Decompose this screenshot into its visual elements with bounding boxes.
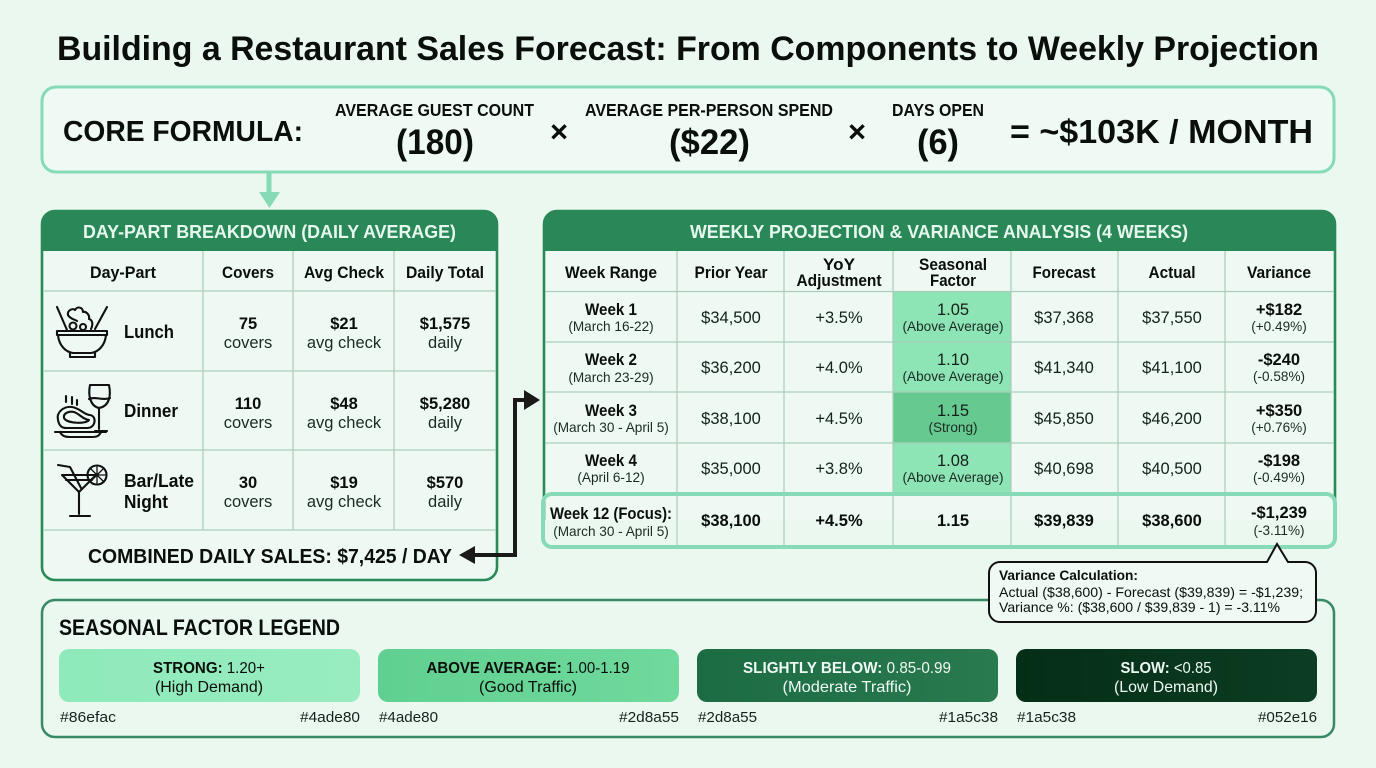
table header: weekly: Prior Year <box>694 263 768 282</box>
row: week 4: (Above Average) <box>902 470 1004 485</box>
table header: weekly: Actual <box>1148 263 1196 282</box>
row: week 12 focus: $38,100 <box>701 512 761 530</box>
row: week 12 focus: 1.15 <box>937 512 969 530</box>
table header: weekly: Forecast <box>1032 263 1096 282</box>
row: week 12 focus: $39,839 <box>1034 512 1094 530</box>
panel: core formula <box>42 87 1334 172</box>
legend: slightly below: #2d8a55 <box>698 709 757 726</box>
row: week 2: +4.0% <box>815 359 863 377</box>
row: lunch: 75 <box>239 315 257 333</box>
row: week 1: $37,550 <box>1142 309 1202 327</box>
row: week 3: 1.15 <box>937 402 969 420</box>
row: week 1: (March 16-22) <box>568 319 654 334</box>
row: week 3: (March 30 - April 5) <box>553 420 669 435</box>
row: week 3: Week 3 <box>585 402 637 420</box>
table header: day-part: Covers <box>222 263 274 282</box>
callout: variance calculation: Variance %: ($38,600 / $39,839 - 1) = -3.11% <box>999 599 1280 615</box>
panel: seasonal factor legend <box>42 600 1334 737</box>
legend: above average: (Good Traffic) <box>479 679 577 696</box>
row: dinner: covers <box>224 414 272 432</box>
table header: weekly: Factor <box>930 271 976 290</box>
row: week 12 focus: (March 30 - April 5) <box>553 524 669 539</box>
row: bar/late night: $19 <box>330 474 358 492</box>
legend: slow <box>1016 649 1317 726</box>
panel: core formula: = ~$103K / MONTH <box>1010 113 1313 150</box>
row: bar/late night <box>58 465 463 516</box>
row: week 3: +4.5% <box>815 410 863 428</box>
legend: slow: SLOW: <0.85 <box>1120 660 1212 677</box>
callout: variance calculation <box>989 544 1316 622</box>
panel: core formula: AVERAGE GUEST COUNT <box>335 100 534 120</box>
row: week 1 <box>568 301 1307 334</box>
row: dinner: $48 <box>330 395 358 413</box>
panel: core formula: ($22) <box>669 123 750 162</box>
row: bar/late night: Night <box>124 491 168 512</box>
row: bar/late night: 30 <box>239 474 257 492</box>
row: week 2: -$240 <box>1258 351 1300 369</box>
legend: slightly below: #1a5c38 <box>939 709 998 726</box>
panel: day-part breakdown <box>41 211 498 580</box>
row: week 3: +$350 <box>1256 402 1302 420</box>
row: week 4: $40,698 <box>1034 460 1094 478</box>
row: bar/late night: $570 <box>427 474 463 492</box>
row: week 4: Week 4 <box>585 452 638 470</box>
legend: slightly below: SLIGHTLY BELOW: 0.85-0.99 <box>743 660 951 677</box>
row: dinner: avg check <box>307 414 382 432</box>
row: week 3: $46,200 <box>1142 410 1202 428</box>
row: week 3: $38,100 <box>701 410 761 428</box>
row: week 4: +3.8% <box>815 460 863 478</box>
legend: strong <box>59 649 360 726</box>
table header: weekly: Adjustment <box>796 271 882 290</box>
legend: slow: #052e16 <box>1258 709 1317 726</box>
row: week 1: $34,500 <box>701 309 761 327</box>
panel: core formula: (6) <box>917 123 959 162</box>
row: week 2 <box>568 351 1305 385</box>
legend: slightly below: (Moderate Traffic) <box>782 679 912 696</box>
row: week 1: (Above Average) <box>902 319 1004 334</box>
legend: above average: #2d8a55 <box>619 709 679 726</box>
legend: slow: #1a5c38 <box>1017 709 1076 726</box>
legend heading: SEASONAL FACTOR LEGEND <box>59 615 340 640</box>
row: week 4: -$198 <box>1258 452 1300 470</box>
row: week 2: 1.10 <box>937 351 969 369</box>
row: week 2: (-0.58%) <box>1253 369 1305 384</box>
panel: core formula: CORE FORMULA: <box>63 116 303 148</box>
legend: above average: #4ade80 <box>379 709 438 726</box>
row: dinner: 110 <box>235 395 261 413</box>
panel: core formula: × <box>848 114 866 149</box>
panel: core formula: DAYS OPEN <box>892 100 984 120</box>
panel: core formula: (180) <box>396 123 474 162</box>
row: week 1: +$182 <box>1256 301 1302 319</box>
panel: weekly projection <box>543 211 1336 547</box>
row: lunch: $1,575 <box>420 315 470 333</box>
row: dinner <box>55 385 470 437</box>
row: week 4 <box>577 452 1305 485</box>
panel: core formula: AVERAGE PER-PERSON SPEND <box>585 100 833 120</box>
legend: strong: #86efac <box>60 709 117 726</box>
arrow: daily sales to weekly projection <box>459 390 540 564</box>
legend: above average <box>378 649 679 726</box>
row: week 1: (+0.49%) <box>1251 319 1307 334</box>
row: dinner: $5,280 <box>420 395 470 413</box>
panel: core formula: × <box>550 114 568 149</box>
row: dinner: Dinner <box>124 400 178 421</box>
row: week 2: (Above Average) <box>902 369 1004 384</box>
row: lunch <box>57 307 470 357</box>
legend: slow: (Low Demand) <box>1114 679 1218 696</box>
callout: variance calculation: Actual ($38,600) - Forecast ($39,839) = -$1,239; <box>999 584 1303 600</box>
icon: salad bowl <box>57 307 107 357</box>
row: bar/late night: daily <box>428 493 463 511</box>
row: week 4: $35,000 <box>701 460 761 478</box>
row: week 4: $40,500 <box>1142 460 1202 478</box>
title: Building a Restaurant Sales Forecast: From Components to Weekly Projection <box>57 30 1319 68</box>
panel heading: day-part: DAY-PART BREAKDOWN (DAILY AVERAGE) <box>83 221 456 242</box>
row: week 4: (-0.49%) <box>1253 470 1305 485</box>
row: week 12 focus <box>543 494 1335 547</box>
seasonal factor cells <box>893 292 1011 493</box>
row: lunch: avg check <box>307 334 382 352</box>
table header: day-part <box>90 263 484 282</box>
row: week 2: $41,340 <box>1034 359 1094 377</box>
callout: variance calculation: Variance Calculation: <box>999 567 1138 583</box>
panel heading: weekly: WEEKLY PROJECTION & VARIANCE ANALYSIS (4 WEEKS) <box>690 221 1188 242</box>
row: week 4: 1.08 <box>937 452 969 470</box>
table header: day-part: Avg Check <box>304 263 384 282</box>
table header: weekly: YoY <box>823 255 856 274</box>
row: week 2: $36,200 <box>701 359 761 377</box>
legend: strong: STRONG: 1.20+ <box>153 660 265 677</box>
row: lunch: Lunch <box>124 321 174 342</box>
icon: cocktail <box>58 465 106 516</box>
row: dinner: daily <box>428 414 463 432</box>
row: bar/late night: Bar/Late <box>124 470 194 491</box>
legend: strong: (High Demand) <box>155 679 263 696</box>
row: lunch: covers <box>224 334 272 352</box>
row: bar/late night: covers <box>224 493 272 511</box>
row: week 12 focus: +4.5% <box>815 512 863 530</box>
row: bar/late night: avg check <box>307 493 382 511</box>
legend: slightly below <box>697 649 998 726</box>
row: week 1: +3.5% <box>815 309 863 327</box>
table header: day-part: Daily Total <box>406 263 484 282</box>
table header: weekly <box>565 255 1311 290</box>
row: week 3: (+0.76%) <box>1251 420 1307 435</box>
row: lunch: $21 <box>330 315 358 333</box>
row: week 12 focus: (-3.11%) <box>1253 523 1305 538</box>
table header: weekly: Variance <box>1247 263 1311 282</box>
arrow: formula to day-part panel <box>259 172 280 208</box>
row: week 4: (April 6-12) <box>577 470 645 485</box>
legend: strong: #4ade80 <box>300 709 360 726</box>
row: week 3: (Strong) <box>928 420 978 435</box>
table header: day-part: Day-Part <box>90 263 156 282</box>
row: week 2: $41,100 <box>1142 359 1202 377</box>
row: week 12 focus: $38,600 <box>1142 512 1202 530</box>
row: week 1: $37,368 <box>1034 309 1094 327</box>
row: week 2: (March 23-29) <box>568 370 654 385</box>
icon: steak and wine <box>55 385 110 437</box>
row: week 1: 1.05 <box>937 301 969 319</box>
table header: weekly: Seasonal <box>919 255 987 274</box>
legend: above average: ABOVE AVERAGE: 1.00-1.19 <box>426 660 630 677</box>
row: lunch: daily <box>428 334 463 352</box>
row: week 12 focus: Week 12 (Focus): <box>550 505 672 523</box>
row: week 2: Week 2 <box>585 351 637 369</box>
row: week 12 focus: -$1,239 <box>1251 504 1307 522</box>
combined daily sales: COMBINED DAILY SALES: $7,425 / DAY <box>88 546 453 568</box>
row: week 3: $45,850 <box>1034 410 1094 428</box>
row: week 3 <box>553 402 1307 435</box>
row: week 1: Week 1 <box>585 301 637 319</box>
table header: weekly: Week Range <box>565 263 657 282</box>
